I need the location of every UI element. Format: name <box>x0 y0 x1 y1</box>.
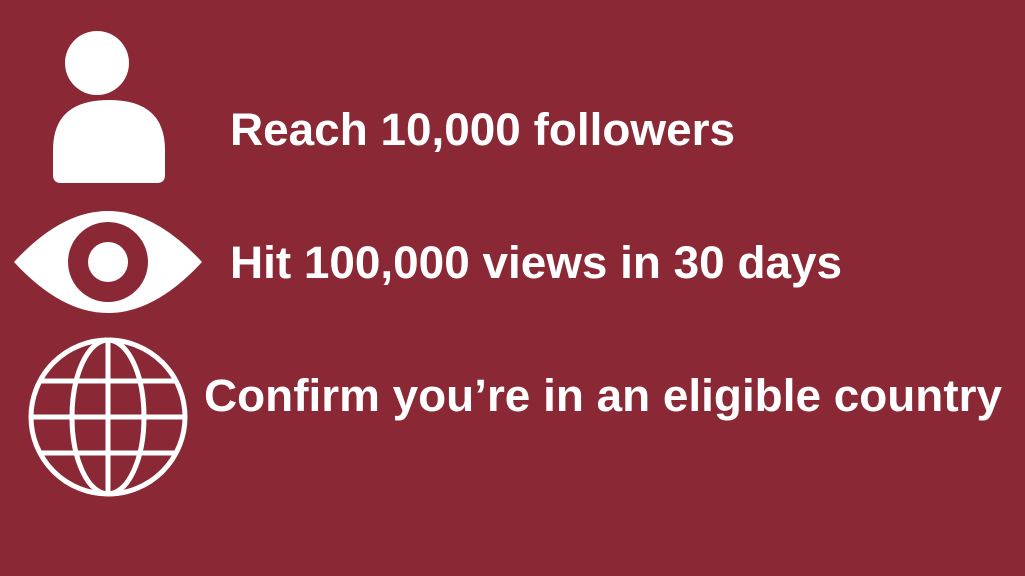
text: followers: Reach 10,000 followers <box>230 104 735 155</box>
text: country: Confirm you’re in an eligible country <box>204 370 1002 421</box>
icon: globe <box>31 340 185 494</box>
icon: eye <box>14 211 202 313</box>
text: views: Hit 100,000 views in 30 days <box>230 237 842 288</box>
icon: person <box>53 31 165 183</box>
